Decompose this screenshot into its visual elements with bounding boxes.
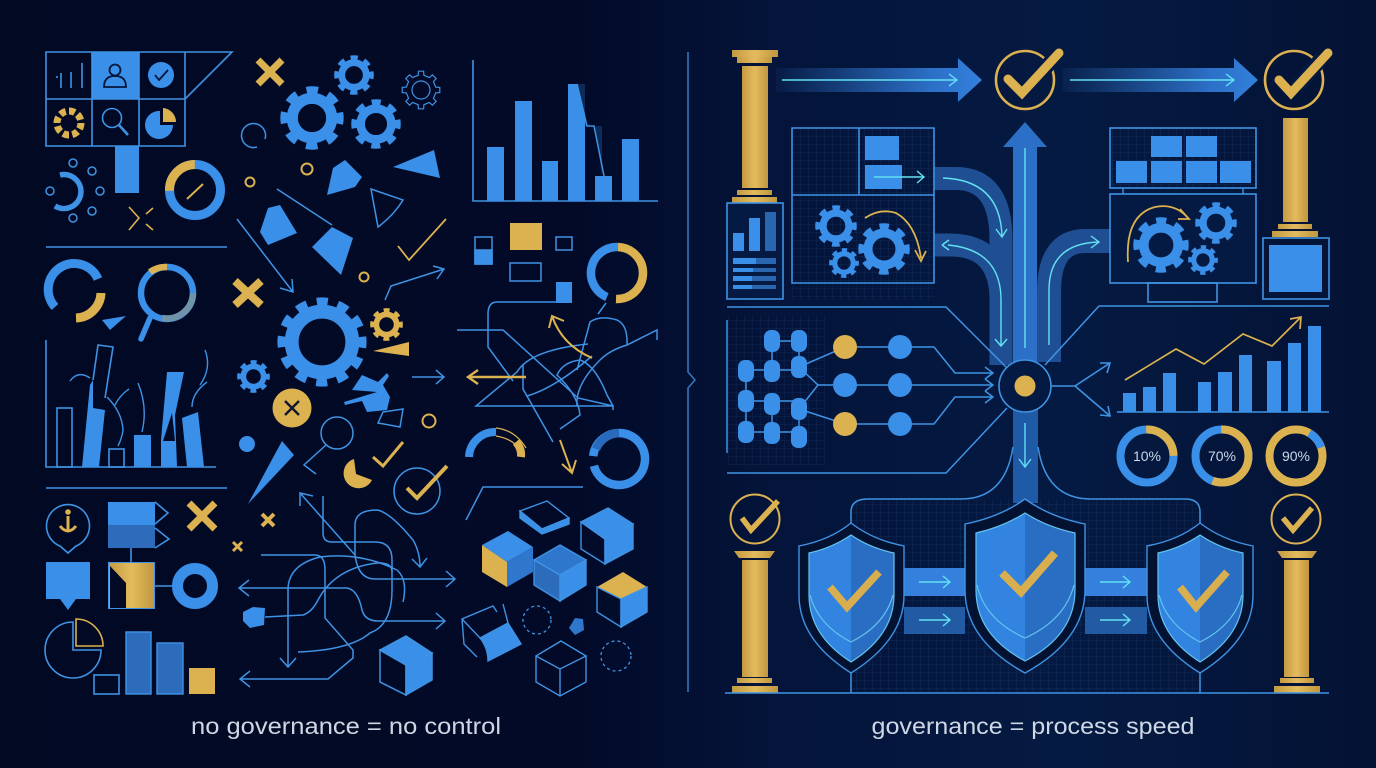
- pillar top right: [1272, 118, 1318, 237]
- bracket lines to shields: [851, 447, 1200, 693]
- flow bands: [934, 178, 1110, 365]
- gold arrows: [468, 316, 592, 473]
- gold cross large: [189, 503, 215, 529]
- top right bar chart: [473, 60, 658, 201]
- donut right: [590, 430, 648, 488]
- dashed circles and blob: [523, 606, 631, 671]
- loader ring with dots: [46, 159, 104, 222]
- band cyan arrows: [942, 178, 1099, 346]
- donut 90%: 90%: [1282, 448, 1310, 464]
- donut 10%: [1120, 430, 1174, 482]
- shield left: [799, 523, 904, 673]
- arrow top 2: [1062, 58, 1258, 102]
- icon grid with triangle flag: [46, 52, 232, 193]
- scattered gears: [240, 58, 400, 390]
- donut 90%: [1259, 419, 1333, 493]
- shield connector bands: [904, 568, 1147, 634]
- flat box: [520, 501, 569, 534]
- donut 70%: [1196, 430, 1248, 482]
- donut blue gold: [591, 247, 643, 314]
- report card: [727, 203, 783, 299]
- cube: lower middle: [380, 636, 432, 695]
- icon: person: [104, 64, 126, 87]
- panel process right: [1110, 128, 1256, 302]
- scattered shards: [239, 150, 440, 504]
- gold brackets: [129, 207, 153, 230]
- output bar chart: [1117, 317, 1329, 412]
- magnifier donut: [141, 267, 193, 339]
- check badge bottom right: [1272, 494, 1320, 544]
- frame lines: [727, 306, 1329, 473]
- central up arrow: [1003, 122, 1047, 365]
- scattered rectangles: [475, 223, 572, 303]
- thin outlines and arrows: [237, 124, 444, 514]
- gold check 2: [1265, 51, 1328, 109]
- hub: [999, 360, 1051, 412]
- blob: [243, 607, 265, 628]
- panel process left: [792, 128, 934, 300]
- cube d gold top: [597, 572, 647, 627]
- panel: no governance (left chaos side): [45, 52, 658, 696]
- isometric cubes: [462, 501, 647, 696]
- cube a: [581, 508, 633, 564]
- caption left: no governance = no control: [191, 713, 501, 739]
- gold check 1: [996, 51, 1059, 109]
- tangled lines right: [457, 302, 657, 442]
- caption right: governance = process speed: [872, 713, 1194, 739]
- gauge: [469, 428, 526, 457]
- icon: pie: [145, 108, 176, 139]
- base line: [725, 692, 1329, 694]
- icon: magnifier: [102, 108, 128, 135]
- warped bar chart: [46, 340, 216, 467]
- gold ticks: [373, 219, 447, 498]
- tangled arrows: [239, 493, 455, 687]
- cube b gold: [482, 531, 533, 587]
- pillar bottom right: [1274, 551, 1320, 693]
- pie outline: [45, 619, 103, 678]
- donut 70%: 70%: [1208, 448, 1236, 464]
- bottom bars: [94, 632, 215, 694]
- hub outputs: [1051, 363, 1110, 416]
- check badge bottom left: [730, 494, 780, 544]
- outline cube: [536, 641, 586, 696]
- gold circle cross: [272, 388, 312, 428]
- info pin: [46, 505, 90, 553]
- pillar top left: [732, 50, 778, 203]
- broken cube: [462, 604, 521, 661]
- scattered rings: [246, 164, 436, 428]
- shield grid: [851, 499, 1200, 693]
- channel down: [1013, 403, 1038, 503]
- flow blocks: [108, 502, 212, 608]
- central divider: [688, 52, 695, 692]
- donut with slash: [170, 164, 220, 216]
- gold crosses: [233, 60, 282, 551]
- icon: bars: [57, 63, 82, 88]
- outline gear: [402, 71, 440, 109]
- panel: governance (right ordered side): [725, 50, 1333, 693]
- cube c: [534, 545, 586, 601]
- gold pac shape: [344, 459, 372, 488]
- broken donut: [48, 263, 101, 318]
- icon: gold block ring: [57, 111, 81, 135]
- pillar bottom left: [732, 551, 778, 693]
- shield right: [1147, 523, 1253, 673]
- network grid: [727, 315, 993, 465]
- blue box under pillar: [1263, 238, 1329, 299]
- donut 10%: 10%: [1133, 448, 1161, 464]
- arrow top 1: [776, 58, 982, 102]
- shield centre: [965, 499, 1085, 673]
- callout box: [46, 562, 90, 610]
- icon: check badge: [148, 62, 174, 88]
